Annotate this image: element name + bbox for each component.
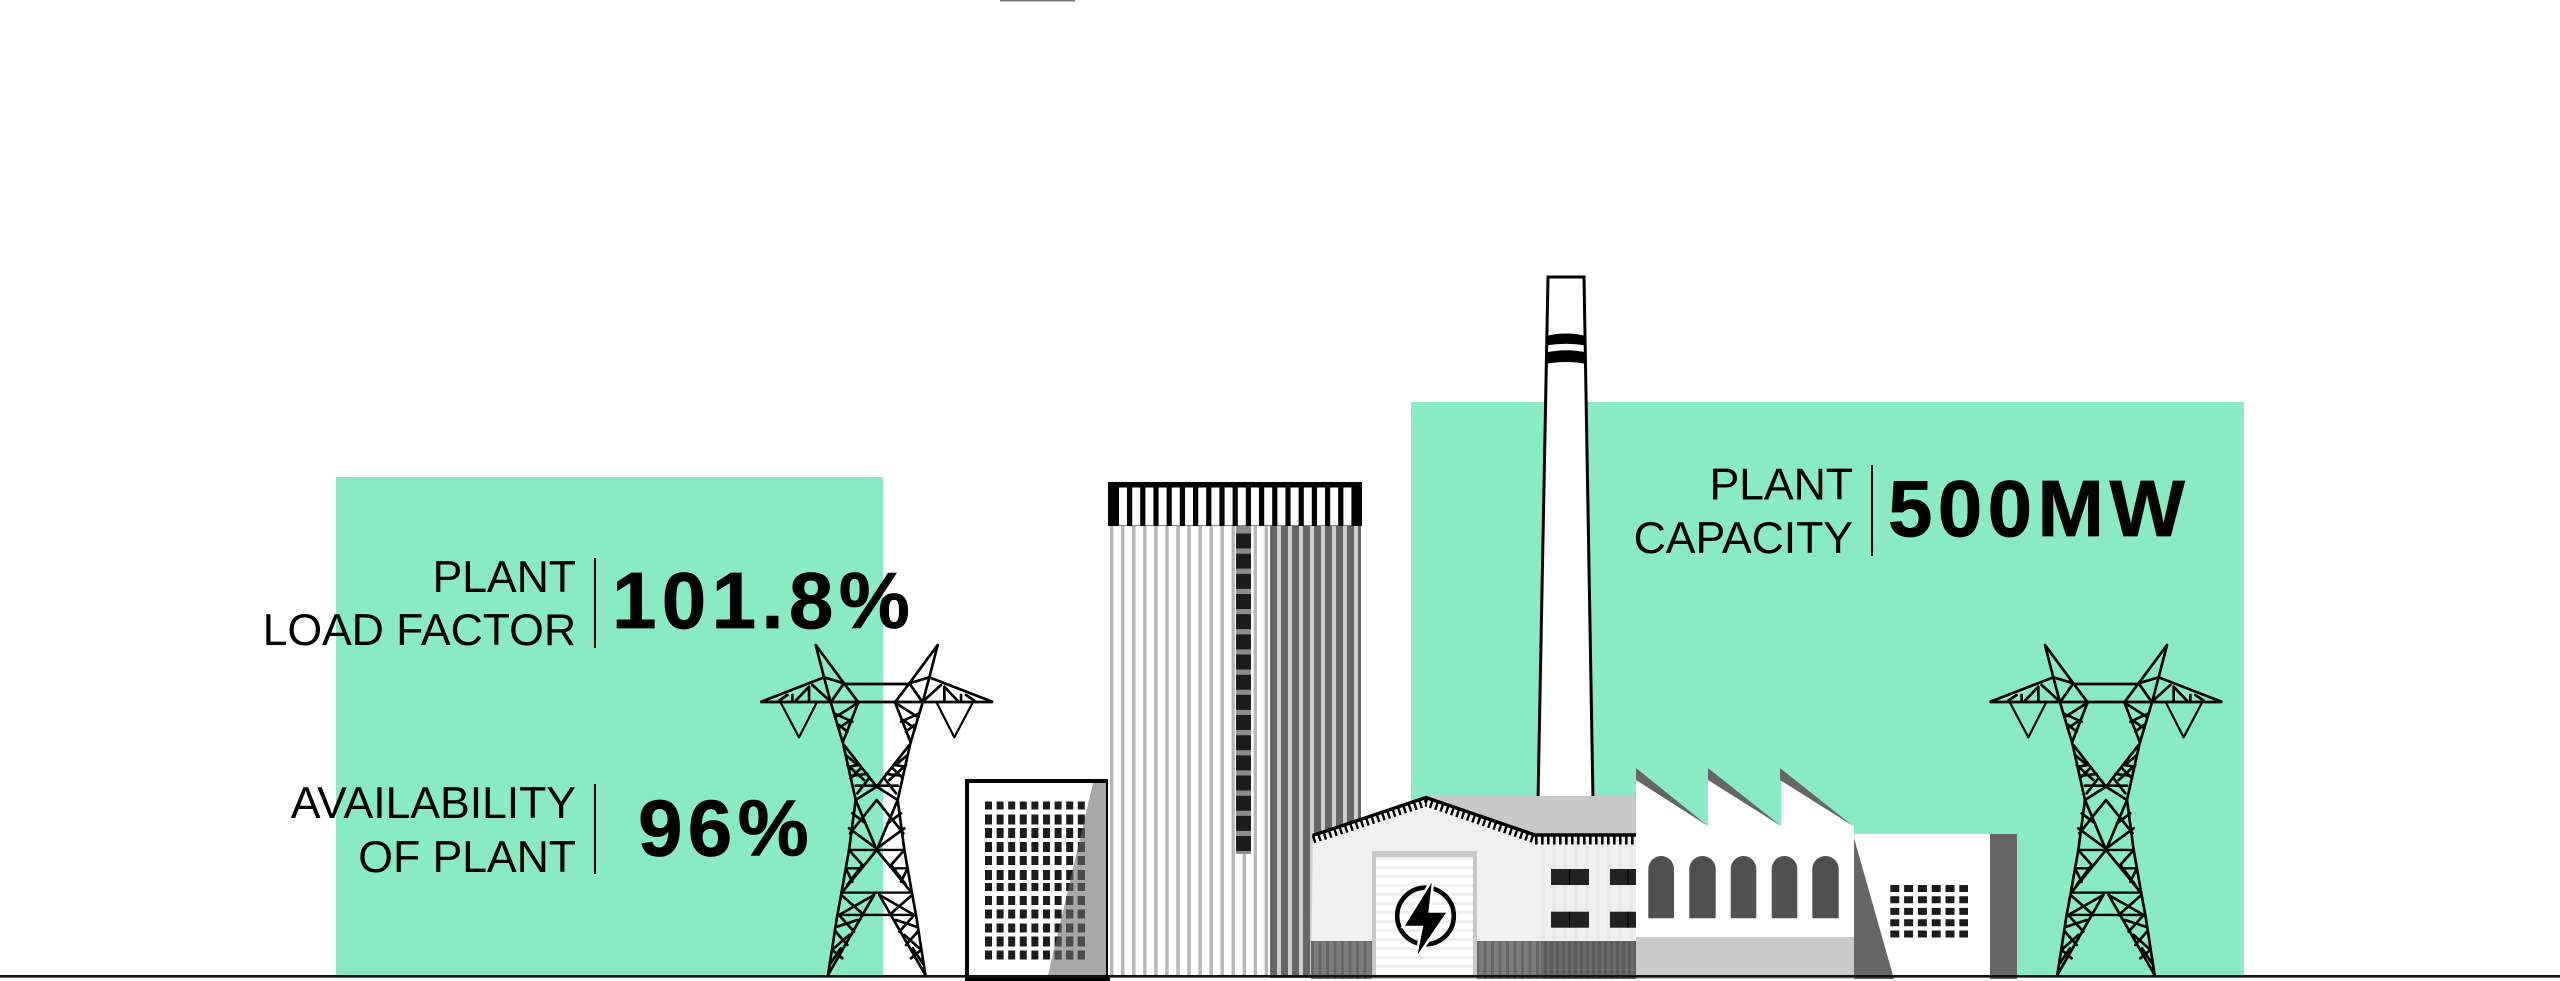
shaded windows <box>1054 820 1084 960</box>
icon: right transmission pylon <box>1991 645 2221 975</box>
value: 101.8% <box>612 556 915 645</box>
smokestack <box>1538 277 1593 800</box>
turbine hall <box>1311 796 1636 979</box>
sawtooth factory <box>1636 768 1854 979</box>
annex building <box>1854 834 2017 979</box>
panel: right green backdrop <box>1411 402 2244 975</box>
label: LOAD FACTOR <box>263 606 576 655</box>
window grid <box>985 806 1086 955</box>
shaded wedge <box>1048 783 1106 975</box>
panel: left green backdrop <box>336 477 883 975</box>
annex side column <box>1990 834 2017 979</box>
slotted tower crown <box>1108 482 1362 526</box>
top edge mark <box>1000 0 1075 2</box>
hall windows <box>1551 869 1636 928</box>
ground line <box>0 975 2560 978</box>
roof shadows <box>1636 768 1853 826</box>
metric: plant load factor <box>263 553 915 655</box>
metric: plant capacity <box>1634 460 2190 563</box>
label: PLANT <box>1709 460 1853 510</box>
grey facade stripes <box>1110 525 1270 977</box>
dark shaded facade <box>1270 525 1361 978</box>
central window column <box>1236 526 1251 854</box>
plinth stripes <box>1311 941 1636 979</box>
icon: left transmission pylon <box>761 645 992 975</box>
label: AVAILABILITY <box>291 779 576 828</box>
label: PLANT <box>432 553 576 602</box>
factory body <box>1636 780 1854 979</box>
door <box>1372 851 1477 979</box>
tall boiler tower <box>1108 482 1362 978</box>
label: OF PLANT <box>358 833 576 882</box>
icon: lightning bolt in ring <box>1397 883 1454 954</box>
annex shadow wedge <box>1854 838 1894 979</box>
roof edge with brackets <box>1313 798 1636 840</box>
hall wall <box>1311 798 1636 978</box>
value: 96% <box>638 784 814 872</box>
value: 500MW <box>1888 464 2190 553</box>
annex window grid <box>1890 888 1968 934</box>
plinth <box>1636 937 1854 979</box>
metric: availability of plant <box>291 779 814 882</box>
small office block <box>965 781 1110 981</box>
label: CAPACITY <box>1634 514 1853 563</box>
grey back roof <box>1426 796 1636 836</box>
arched windows <box>1648 856 1839 918</box>
